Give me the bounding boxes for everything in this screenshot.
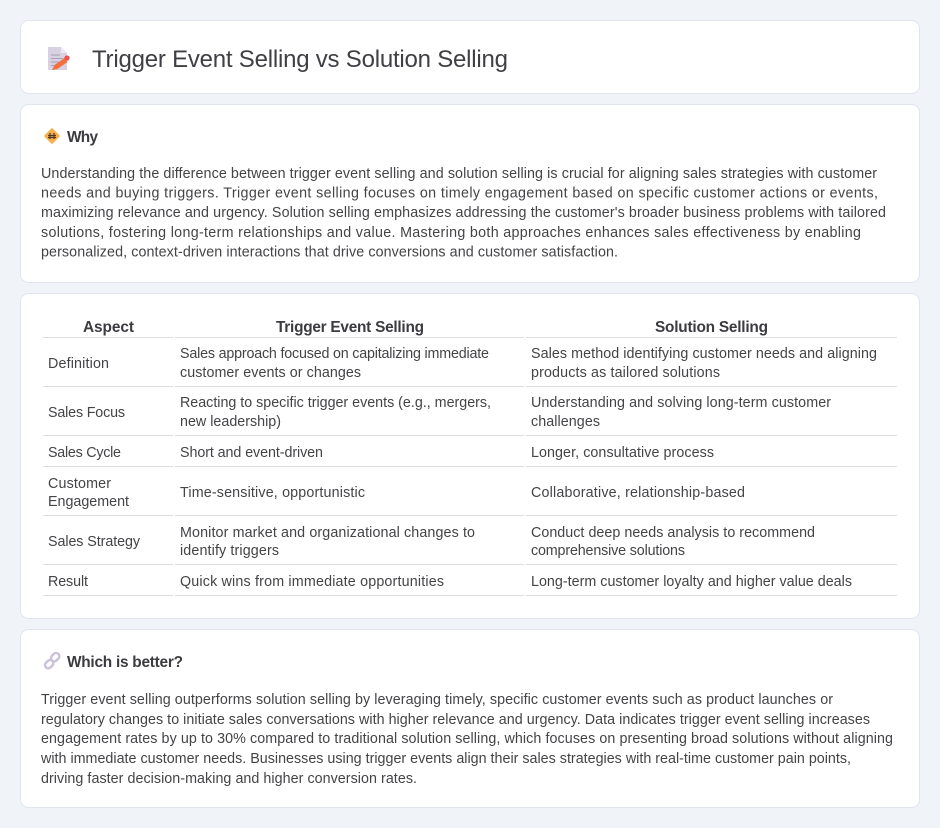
text block: why paragraph <box>41 166 886 260</box>
row: sales strategy: comprehensive solutions <box>531 543 685 559</box>
row: sales cycle: Short and event-driven <box>180 445 323 461</box>
table header <box>43 319 897 338</box>
text block: which is better paragraph: Trigger event selling outperforms solution selling by leveraging timely, specific customer events such as product launches or <box>41 692 833 708</box>
row: definition: products as tailored solutions <box>531 365 720 381</box>
row: customer engagement: Engagement <box>48 494 129 510</box>
row: definition <box>43 346 897 386</box>
row: definition: Sales approach focused on capitalizing immediate <box>180 346 489 362</box>
table header: Trigger Event Selling <box>276 319 424 336</box>
panel: why <box>20 104 920 282</box>
row: sales cycle: Sales Cycle <box>48 445 121 461</box>
icon: document with pencil <box>48 47 70 70</box>
text block: which is better paragraph <box>40 692 893 787</box>
row: definition: Sales method identifying customer needs and aligning <box>531 346 877 362</box>
row: sales strategy: Monitor market and organizational changes to <box>180 525 475 541</box>
text block: which is better paragraph: engagement rates by up to 30% compared to traditional solution selling, which focuses on presenting broad solutions without aligning <box>41 731 893 747</box>
heading: why: Why <box>67 129 98 146</box>
panel: comparison table <box>20 294 920 618</box>
row: sales focus: Sales Focus <box>48 405 125 421</box>
row: result: Quick wins from immediate opportunities <box>180 574 444 590</box>
row: sales strategy: identify triggers <box>180 543 279 559</box>
text block: why paragraph: solutions, fostering long-term relationships and value. Mastering both approaches enhances sales effectiveness by enabling <box>41 225 861 241</box>
row: sales focus: Reacting to specific trigger events (e.g., mergers, <box>180 395 491 411</box>
text block: why paragraph: personalized, context-driven interactions that drive conversions and customer satisfaction. <box>41 244 618 260</box>
row: sales focus <box>43 395 897 436</box>
text block: why paragraph: Understanding the difference between trigger event selling and solution selling is crucial for aligning sales strategies with customer <box>41 166 877 182</box>
row: definition: customer events or changes <box>180 365 361 381</box>
heading: which is better: Which is better? <box>67 654 183 671</box>
row: customer engagement <box>43 476 897 516</box>
row: result: Result <box>48 574 88 590</box>
row: sales focus: challenges <box>531 414 600 430</box>
row: definition: Definition <box>48 356 109 372</box>
text block: which is better paragraph: driving faster decision-making and higher conversion rates. <box>41 771 417 787</box>
icon: orange diamond <box>44 128 60 144</box>
row: result: Long-term customer loyalty and higher value deals <box>531 574 852 590</box>
row: sales strategy: Sales Strategy <box>48 534 141 550</box>
row: sales strategy <box>43 525 897 564</box>
row: result <box>43 574 897 596</box>
icon: chain link <box>44 652 61 670</box>
text block: which is better paragraph: with immediate customer needs. Businesses using trigger events align their sales strategies with real-time customer pain points, <box>40 751 851 767</box>
panel: which is better <box>20 630 920 808</box>
text block: why paragraph: needs and buying triggers. Trigger event selling focuses on timely engagement based on specific customer actions or events, <box>41 186 878 202</box>
row: customer engagement: Collaborative, relationship-based <box>531 485 745 501</box>
text block: why paragraph: maximizing relevance and urgency. Solution selling emphasizes addressing the customer's broader business problems with tailored <box>41 205 886 221</box>
row: sales focus: new leadership) <box>180 414 281 430</box>
text block: which is better paragraph: regulatory changes to initiate sales conversations with higher relevance and urgency. Data indicates trigger event selling increases <box>41 712 870 728</box>
row: sales strategy: Conduct deep needs analysis to recommend <box>531 525 815 541</box>
panel: title <box>20 20 920 94</box>
title text: Trigger Event Selling vs Solution Selling <box>92 46 508 73</box>
row: sales focus: Understanding and solving long-term customer <box>531 395 831 411</box>
table header: Aspect <box>83 319 134 336</box>
table header: Solution Selling <box>655 319 768 336</box>
row: customer engagement: Time-sensitive, opportunistic <box>180 485 365 501</box>
row: customer engagement: Customer <box>48 476 111 492</box>
row: sales cycle: Longer, consultative process <box>531 445 714 461</box>
row: sales cycle <box>43 445 897 466</box>
